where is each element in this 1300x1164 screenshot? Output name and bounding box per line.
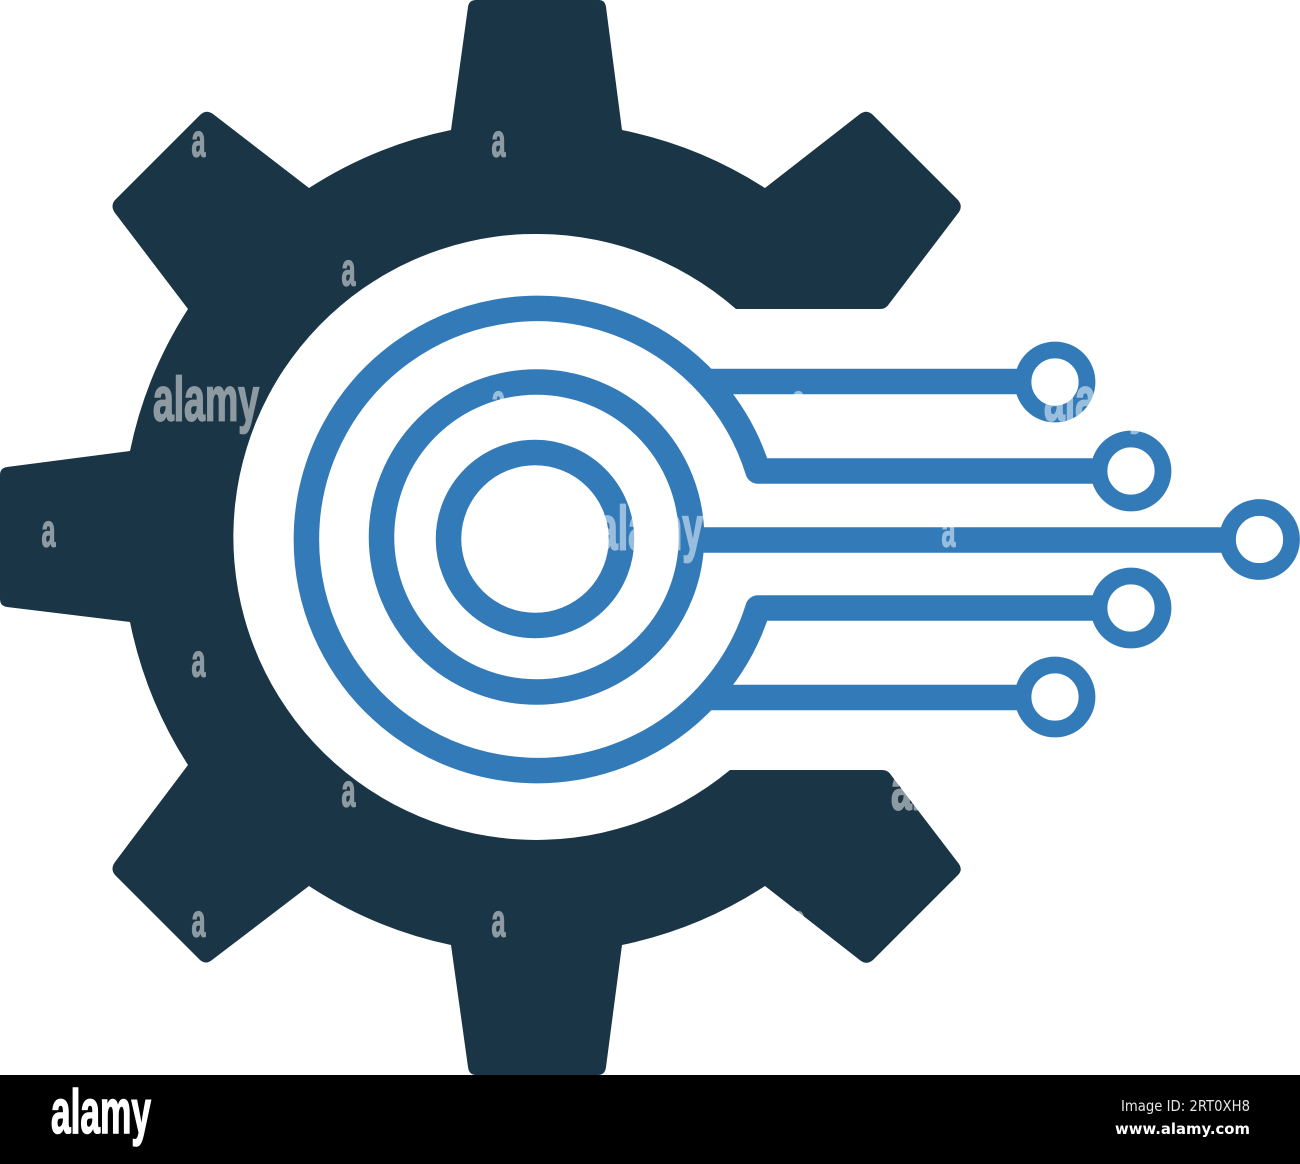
- trace 5: [706, 685, 1030, 710]
- node 2: [1099, 439, 1163, 503]
- node 5: [1023, 665, 1087, 729]
- watermarks: a: [792, 374, 806, 426]
- watermarks: a: [342, 244, 356, 296]
- outer ring with traces 2 and 4: [306, 309, 1110, 770]
- watermarks: a: [42, 504, 56, 556]
- node 1: [1023, 350, 1087, 414]
- watermarks: a: [342, 764, 356, 816]
- watermarks: a: [192, 894, 206, 946]
- circuit: concentric rings and traces: [306, 309, 1235, 770]
- watermarks: alamy: [153, 366, 259, 434]
- watermarks: alamy: [1044, 366, 1150, 434]
- watermarks: a: [192, 634, 206, 686]
- footer logo: alamy: [51, 1078, 151, 1147]
- image id: Image ID: 2RT0XH8: [1121, 1097, 1250, 1115]
- circuit nodes: [1023, 350, 1292, 729]
- watermarks: alamy: [597, 494, 703, 564]
- icon: dark gear with open right side: [0, 0, 961, 1075]
- node 4: [1099, 576, 1163, 640]
- trace 1: [708, 369, 1030, 394]
- watermarks: [42, 114, 1150, 946]
- inner ring: [448, 452, 622, 626]
- website: www.alamy.com: [1115, 1120, 1250, 1138]
- footer bar: [0, 1075, 1300, 1164]
- watermarks: alamy: [891, 754, 997, 824]
- node 3: [1228, 508, 1292, 572]
- trace 3: [698, 527, 1235, 553]
- watermarks: a: [942, 504, 956, 556]
- middle ring: [382, 382, 692, 692]
- watermarks: a: [792, 894, 806, 946]
- watermarks: a: [492, 114, 506, 166]
- watermarks: a: [492, 894, 506, 946]
- watermarks: a: [492, 374, 506, 426]
- watermarks: a: [192, 114, 206, 166]
